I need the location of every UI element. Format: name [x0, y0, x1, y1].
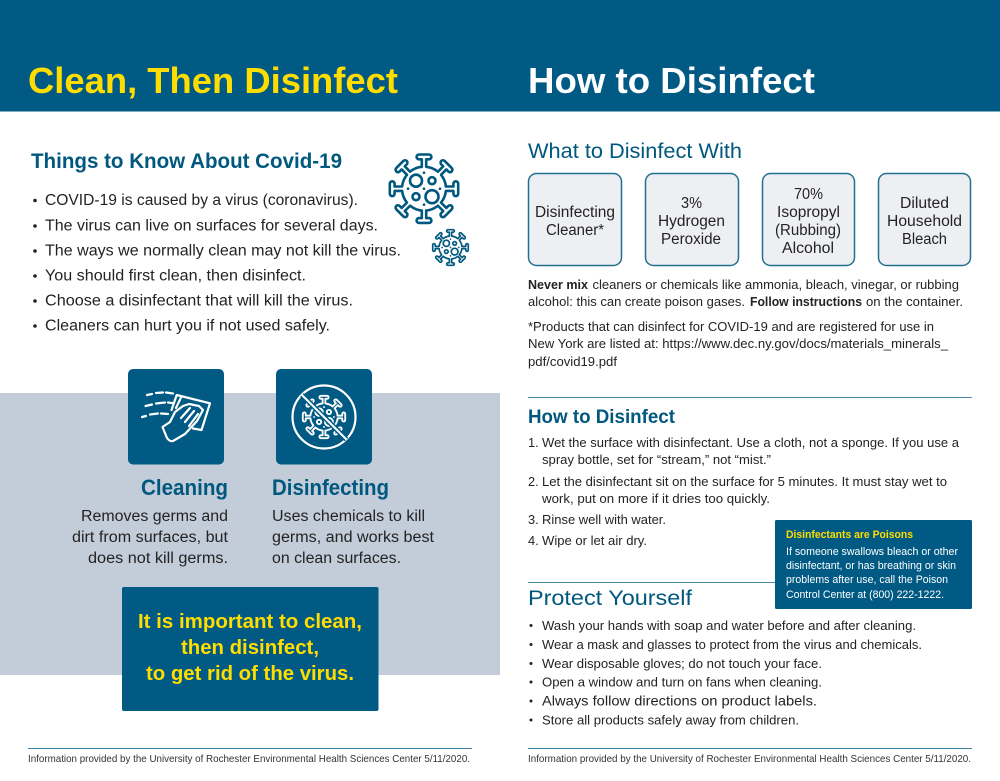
card: hydrogen peroxide: Hydrogen: [658, 213, 725, 230]
text: product footnote: pdf/covid19.pdf: [528, 354, 617, 369]
card: diluted bleach: [878, 174, 970, 266]
card: isopropyl alcohol: Alcohol: [782, 240, 834, 257]
card: isopropyl alcohol: Isopropyl: [777, 204, 840, 221]
card: isopropyl alcohol: [762, 174, 854, 266]
text: disinfecting description: on clean surfaces.: [272, 550, 401, 567]
bullet list: protect yourself: Wear disposable gloves; do not touch your face.: [542, 656, 822, 671]
title: How to Disinfect: How to Disinfect: [528, 60, 815, 101]
numbered steps: [528, 435, 960, 548]
text: product footnote: New York are listed at: https://www.dec.ny.gov/docs/materials_minerals_: [528, 336, 949, 351]
text: product footnote: [528, 319, 949, 369]
icon: hand wiping with cloth: [128, 369, 224, 464]
bullet list: virus facts: You should first clean, then disinfect.: [45, 268, 306, 284]
text: never mix warning: on the container.: [866, 294, 963, 309]
bullet list: virus facts: The ways we normally clean may not kill the virus.: [45, 242, 401, 260]
text: never mix warning: [528, 277, 963, 309]
numbered steps: spray bottle, set for “stream,” not “mist.”: [542, 452, 771, 467]
bullet list: protect yourself: [530, 618, 922, 728]
numbered steps: work, put on more if it dries too quickly.: [541, 491, 770, 506]
callout: disinfectants are poisons: Control Center at (800) 222-1222.: [786, 589, 944, 601]
text: cleaning description: dirt from surfaces, but: [72, 529, 229, 546]
footer: left source: Information provided by the University of Rochester Environmental Health Sciences Center 5/11/2020.: [28, 753, 470, 765]
callout: disinfectants are poisons: problems after use, call the Poison: [786, 574, 948, 586]
bullet list: protect yourself: Store all products safely away from children.: [542, 712, 799, 728]
text: disinfecting description: [272, 508, 435, 567]
card: hydrogen peroxide: Peroxide: [661, 231, 721, 248]
numbered steps: Wet the surface with disinfectant. Use a cloth, not a sponge. If you use a: [542, 435, 960, 450]
text: cleaning description: does not kill germs.: [88, 550, 228, 567]
numbered steps: 3.: [528, 512, 539, 527]
bullet list: protect yourself: Always follow directions on product labels.: [542, 694, 817, 708]
numbered steps: Rinse well with water.: [542, 512, 666, 527]
card: diluted bleach: Bleach: [902, 231, 947, 248]
callout: clean then disinfect: It is important to clean,: [138, 611, 362, 633]
numbered steps: 1.: [528, 435, 539, 450]
card: isopropyl alcohol: (Rubbing): [775, 222, 841, 239]
card: diluted bleach: Diluted: [900, 195, 949, 212]
heading: Things to Know About Covid-19: Things to Know About Covid-19: [31, 150, 342, 173]
heading: What to Disinfect With: What to Disinfect With: [528, 140, 742, 163]
header band: [0, 0, 1000, 112]
heading: Disinfecting: Disinfecting: [272, 475, 389, 500]
callout: disinfectants are poisons: [775, 520, 972, 609]
numbered steps: Let the disinfectant sit on the surface for 5 minutes. It must stay wet to: [542, 474, 947, 489]
icon: no virus: [276, 369, 372, 464]
bullet list: virus facts: Choose a disinfectant that will kill the virus.: [45, 292, 353, 310]
text: cleaning description: [72, 508, 229, 567]
bullet list: virus facts: COVID-19 is caused by a virus (coronavirus).: [45, 192, 358, 209]
text: never mix warning: alcohol: this can create poison gases.: [528, 294, 745, 309]
card: hydrogen peroxide: [646, 174, 738, 266]
numbered steps: Wipe or let air dry.: [542, 533, 647, 548]
numbered steps: 4.: [528, 533, 539, 548]
title: Clean, Then Disinfect: Clean, Then Disinfect: [28, 60, 398, 101]
callout: disinfectants are poisons: disinfectant, or has breathing or skin: [786, 560, 956, 572]
card: diluted bleach: Household: [887, 213, 962, 230]
text: never mix warning: Follow instructions: [750, 294, 862, 309]
numbered steps: 2.: [528, 474, 539, 489]
card: disinfecting cleaner: Cleaner*: [546, 222, 604, 239]
footer: right source: Information provided by the University of Rochester Environmental Health Sciences Center 5/11/2020.: [528, 753, 971, 765]
text: product footnote: *Products that can disinfect for COVID-19 and are registered for use in: [528, 319, 934, 334]
text: never mix warning: Never mix: [528, 277, 589, 292]
callout: disinfectants are poisons: Disinfectants are Poisons: [786, 529, 913, 541]
card: disinfecting cleaner: Disinfecting: [535, 204, 615, 221]
bullet list: protect yourself: Wash your hands with soap and water before and after cleaning.: [542, 618, 916, 633]
heading: How to Disinfect steps: How to Disinfect: [528, 407, 676, 428]
panel: cleaning vs disinfecting: [0, 393, 500, 675]
text: disinfecting description: germs, and works best: [272, 529, 435, 546]
bullet list: protect yourself: Wear a mask and glasses to protect from the virus and chemicals.: [542, 637, 922, 652]
card: disinfecting cleaner: [528, 174, 622, 266]
bullet list: virus facts: The virus can live on surfaces for several days.: [45, 218, 378, 234]
card: isopropyl alcohol: 70%: [794, 186, 823, 203]
heading: Protect Yourself: Protect Yourself: [528, 586, 692, 610]
text: never mix warning: cleaners or chemicals like ammonia, bleach, vinegar, or rubbing: [592, 277, 959, 292]
icon: large virus: [390, 154, 458, 223]
callout: clean then disinfect: [122, 587, 378, 711]
bullet list: virus facts: [33, 192, 401, 334]
text: disinfecting description: Uses chemicals to kill: [272, 508, 425, 525]
icon: small virus: [433, 230, 468, 265]
bullet list: protect yourself: Open a window and turn on fans when cleaning.: [542, 674, 822, 690]
card: hydrogen peroxide: 3%: [681, 195, 702, 212]
bullet list: virus facts: Cleaners can hurt you if not used safely.: [45, 318, 330, 334]
callout: disinfectants are poisons: If someone swallows bleach or other: [786, 546, 958, 558]
callout: clean then disinfect: then disinfect,: [181, 637, 319, 659]
heading: Cleaning: Cleaning: [141, 475, 228, 500]
text: cleaning description: Removes germs and: [81, 508, 228, 525]
callout: clean then disinfect: to get rid of the virus.: [146, 663, 354, 685]
